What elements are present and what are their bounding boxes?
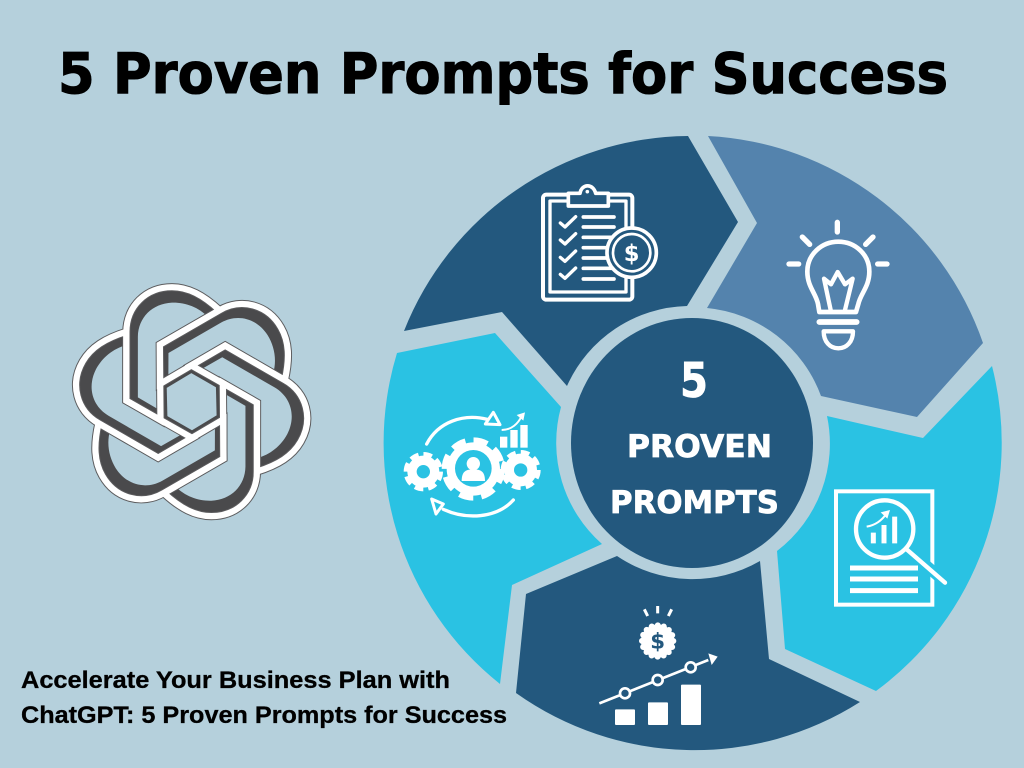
icon: light bulb: [789, 222, 887, 348]
number 5: 5: [680, 353, 708, 409]
center circle: [571, 318, 813, 568]
center text: [610, 353, 779, 521]
icon: growth chart with dollar badge: [599, 606, 718, 725]
icon: knot logo: [60, 287, 323, 516]
icon: clipboard with dollar coin: $: [624, 241, 640, 267]
title: 5 Proven Prompts for Success: [58, 42, 948, 107]
icon: clipboard with dollar coin: [543, 186, 656, 300]
segment: left cyan: [384, 333, 602, 684]
caption line 1: Accelerate Your Business Plan with: [21, 667, 450, 694]
icon: gears with person and arrows: [407, 412, 538, 516]
caption line 2: ChatGPT: 5 Proven Prompts for Success: [21, 702, 507, 729]
segment: top dark: [404, 136, 738, 386]
segment: bottom dark: [516, 556, 860, 750]
word: prompts: PROMPTS: [610, 485, 779, 521]
word: proven: PROVEN: [627, 429, 772, 465]
icon: document with magnifier: [836, 491, 947, 605]
segment: right cyan: [777, 366, 1002, 691]
icon: growth chart with dollar badge: $: [650, 630, 665, 655]
segment: top right mid blue: [707, 136, 983, 417]
caption: [21, 667, 507, 729]
